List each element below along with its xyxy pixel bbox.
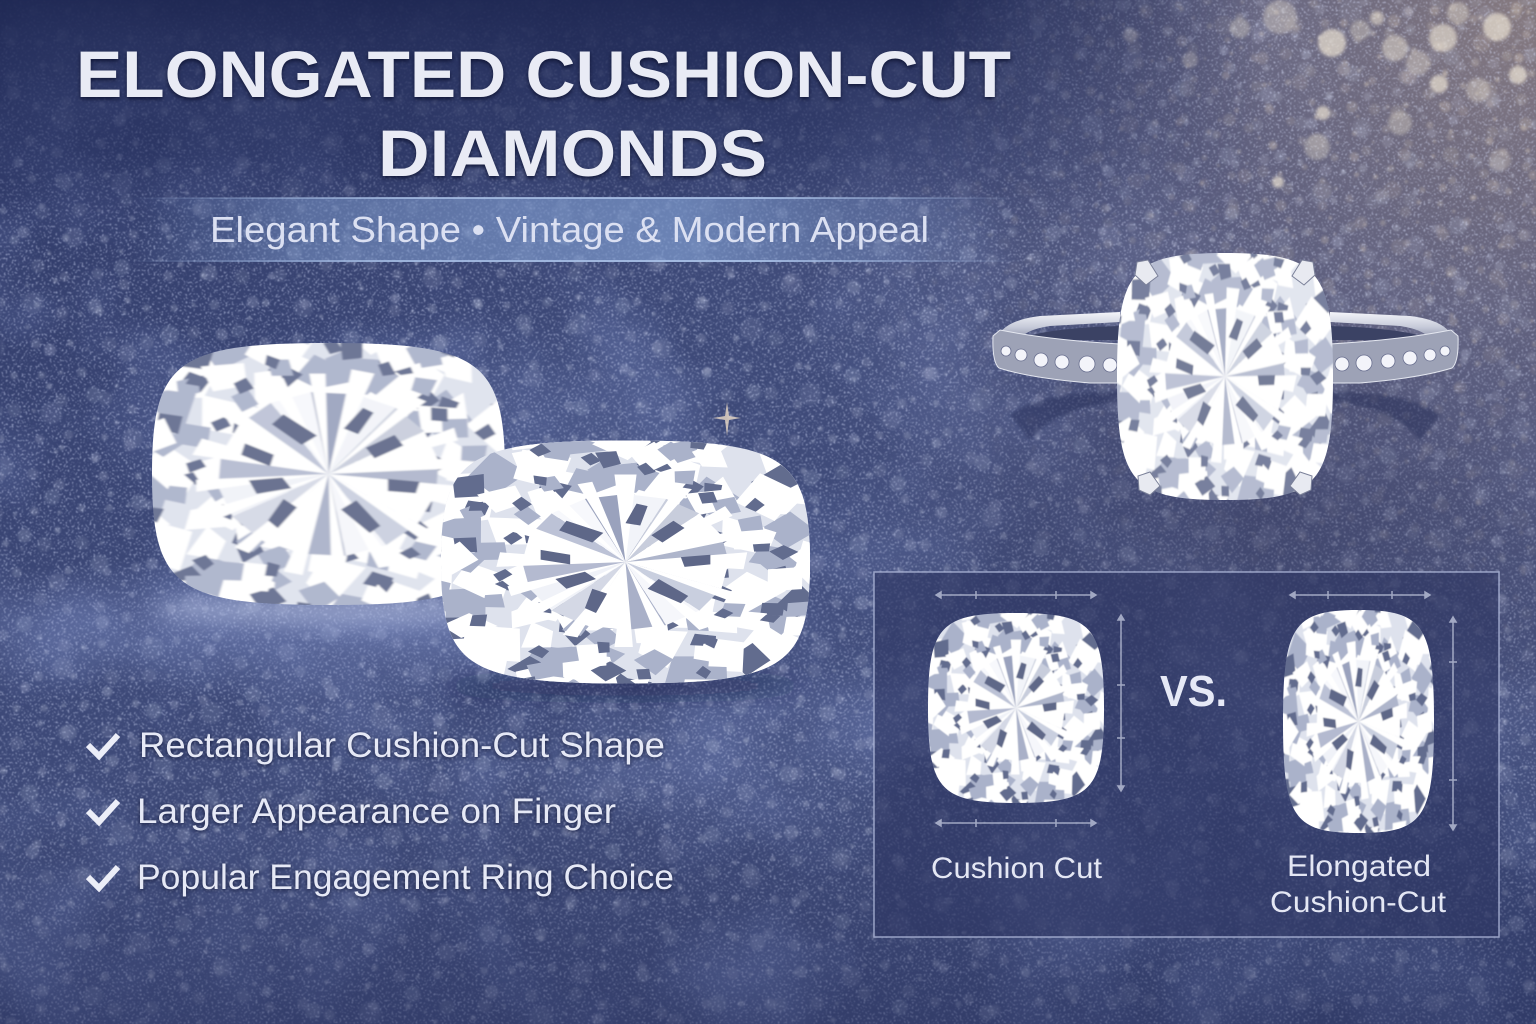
subtitle banner	[130, 197, 1020, 262]
decorative star sparkle	[713, 402, 741, 436]
title	[76, 37, 1011, 190]
label: elongated cushion-cut	[1270, 850, 1447, 919]
decorative bokeh lights	[1123, 0, 1527, 188]
measurement guides: elongated	[1290, 591, 1457, 830]
icon: large elongated cushion diamond, front	[441, 440, 810, 707]
panel: cushion vs elongated comparison	[873, 571, 1500, 938]
vs label: VS.	[1160, 667, 1227, 716]
icon: cushion cut diamond	[928, 613, 1104, 803]
check item 1: Rectangular Cushion-Cut Shape	[139, 726, 665, 765]
title: ELONGATED CUSHION-CUT	[76, 37, 1011, 111]
icon: large cushion-cut diamond, back	[152, 343, 504, 633]
label: cushion cut: Cushion Cut	[931, 852, 1103, 885]
title: DIAMONDS	[378, 116, 767, 190]
ring center stone	[1117, 253, 1333, 500]
check item 2: Larger Appearance on Finger	[137, 792, 616, 831]
measurement guides: cushion	[936, 591, 1125, 827]
ring shadow	[1010, 392, 1440, 440]
ring pave band right	[1330, 330, 1458, 383]
label: elongated cushion-cut: Elongated	[1287, 850, 1431, 883]
ring pave band left	[993, 330, 1120, 383]
icon: engagement ring	[992, 253, 1459, 500]
checklist	[88, 726, 674, 897]
subtitle banner: Elegant Shape • Vintage & Modern Appeal	[210, 209, 929, 250]
icon: elongated cushion diamond	[1283, 610, 1434, 833]
check item 3: Popular Engagement Ring Choice	[137, 858, 674, 897]
label: elongated cushion-cut: Cushion-Cut	[1270, 886, 1447, 919]
ring back band	[998, 312, 1452, 340]
ring prongs	[1135, 260, 1315, 495]
